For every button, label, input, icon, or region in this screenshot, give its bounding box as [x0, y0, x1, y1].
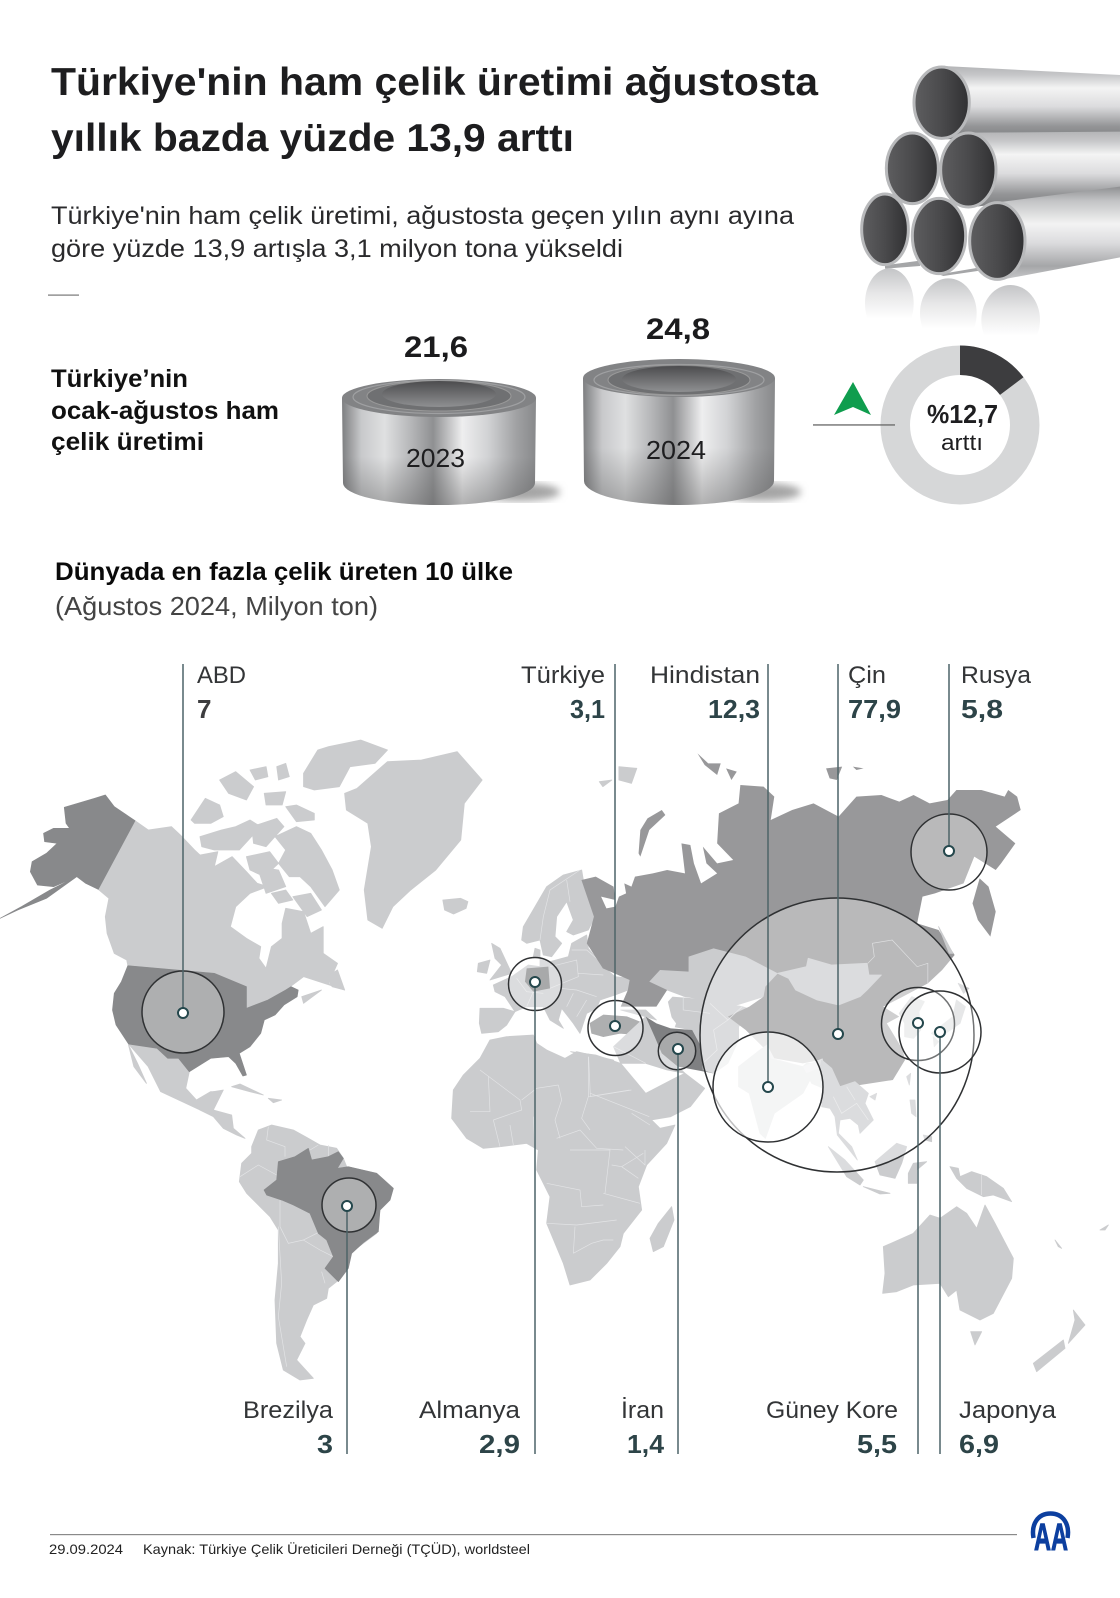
- label: Hindistan: Hindistan: [650, 662, 760, 689]
- label: Çin: 77,9: [848, 694, 901, 724]
- location dots: [178, 846, 954, 1211]
- south america, africa: [200, 1035, 675, 1380]
- side label: [51, 365, 279, 456]
- coil 2024: [583, 313, 801, 505]
- leader lines: [183, 664, 949, 1454]
- label: Hindistan: [650, 662, 760, 724]
- label: Güney Kore: [766, 1397, 898, 1459]
- Russia and China: [581, 753, 1021, 1087]
- coil 2023: 2023: [406, 443, 465, 473]
- section heading: Dünyada en fazla çelik üreten 10 ülke: [55, 558, 513, 586]
- label: Japonya: Japonya: [959, 1397, 1057, 1424]
- label: Türkiye: Türkiye: [521, 662, 605, 689]
- logo: AA: AA: [1034, 1517, 1068, 1559]
- label: Çin: [848, 662, 901, 724]
- subtitle: Türkiye'nin ham çelik üretimi, ağustosta geçen yılın aynı ayına: [51, 202, 794, 230]
- asia: [571, 753, 1021, 1138]
- Iran: [646, 1017, 714, 1073]
- label: Brezilya: Brezilya: [243, 1397, 334, 1424]
- section heading: [55, 558, 513, 621]
- label: Güney Kore: 5,5: [857, 1429, 897, 1459]
- donut chart: arttı: [941, 430, 983, 455]
- label: Çin: Çin: [848, 662, 886, 689]
- europe: [477, 870, 643, 1037]
- label: Rusya: [961, 662, 1032, 724]
- section heading: (Ağustos 2024, Milyon ton): [55, 591, 378, 621]
- subtitle: [51, 202, 794, 263]
- label: Almanya: [419, 1397, 521, 1459]
- Korea and Japan: [899, 927, 969, 1047]
- label: Almanya: Almanya: [419, 1397, 521, 1424]
- label: Brezilya: 3: [317, 1429, 333, 1459]
- footer: [49, 1534, 1017, 1557]
- coil 2023: 21,6: [404, 331, 468, 364]
- bubbles: [142, 814, 987, 1232]
- label: ABD: 7: [197, 694, 211, 724]
- donut chart: [895, 346, 1025, 490]
- Germany: [525, 967, 550, 992]
- label: İran: [621, 1397, 665, 1459]
- Africa: [452, 1035, 675, 1285]
- label: Rusya: Rusya: [961, 662, 1032, 689]
- Mongolia: [778, 958, 881, 1005]
- label: İran: 1,4: [627, 1429, 665, 1459]
- label: İran: İran: [621, 1397, 664, 1424]
- label: Hindistan: 12,3: [708, 694, 760, 724]
- label: ABD: [197, 662, 246, 724]
- label: Güney Kore: Güney Kore: [766, 1397, 898, 1424]
- label: Rusya: 5,8: [961, 694, 1003, 724]
- footer: 29.09.2024: [49, 1541, 123, 1557]
- label: Japonya: [959, 1397, 1057, 1459]
- Brazil: [264, 1148, 393, 1282]
- label: ABD: ABD: [197, 662, 246, 689]
- americas base: [0, 740, 482, 1130]
- subtitle: göre yüzde 13,9 artışla 3,1 milyon tona yükseldi: [51, 235, 623, 263]
- side label: çelik üretimi: [51, 428, 204, 456]
- southeast asia: [807, 1060, 1012, 1202]
- USA: [0, 795, 298, 1076]
- logo: AA: [1033, 1514, 1068, 1559]
- India: [739, 1045, 824, 1138]
- donut chart: %12,7: [927, 399, 998, 429]
- label: Almanya: 2,9: [479, 1429, 520, 1459]
- icon: green up arrow: [813, 382, 895, 426]
- world map: [0, 664, 1108, 1454]
- coil 2024: 24,8: [646, 313, 710, 346]
- label: Japonya: 6,9: [959, 1429, 999, 1459]
- icon: stacked steel pipes: [862, 66, 1120, 355]
- title: Türkiye'nin ham çelik üretimi ağustosta: [51, 61, 818, 104]
- side label: ocak-ağustos ham: [51, 397, 279, 425]
- oceania: [883, 1205, 1108, 1372]
- side label: Türkiye’nin: [51, 365, 188, 393]
- label: Türkiye: 3,1: [570, 694, 605, 724]
- footer: Kaynak: Türkiye Çelik Üreticileri Derneği (TÇÜD), worldsteel: [143, 1540, 530, 1557]
- coil 2023: [342, 331, 560, 505]
- label: Türkiye: [521, 662, 605, 724]
- coil 2024: 2024: [646, 435, 706, 465]
- label: Brezilya: [243, 1397, 334, 1459]
- title: [51, 61, 818, 160]
- Turkey: [590, 1015, 643, 1037]
- title: yıllık bazda yüzde 13,9 arttı: [51, 117, 574, 160]
